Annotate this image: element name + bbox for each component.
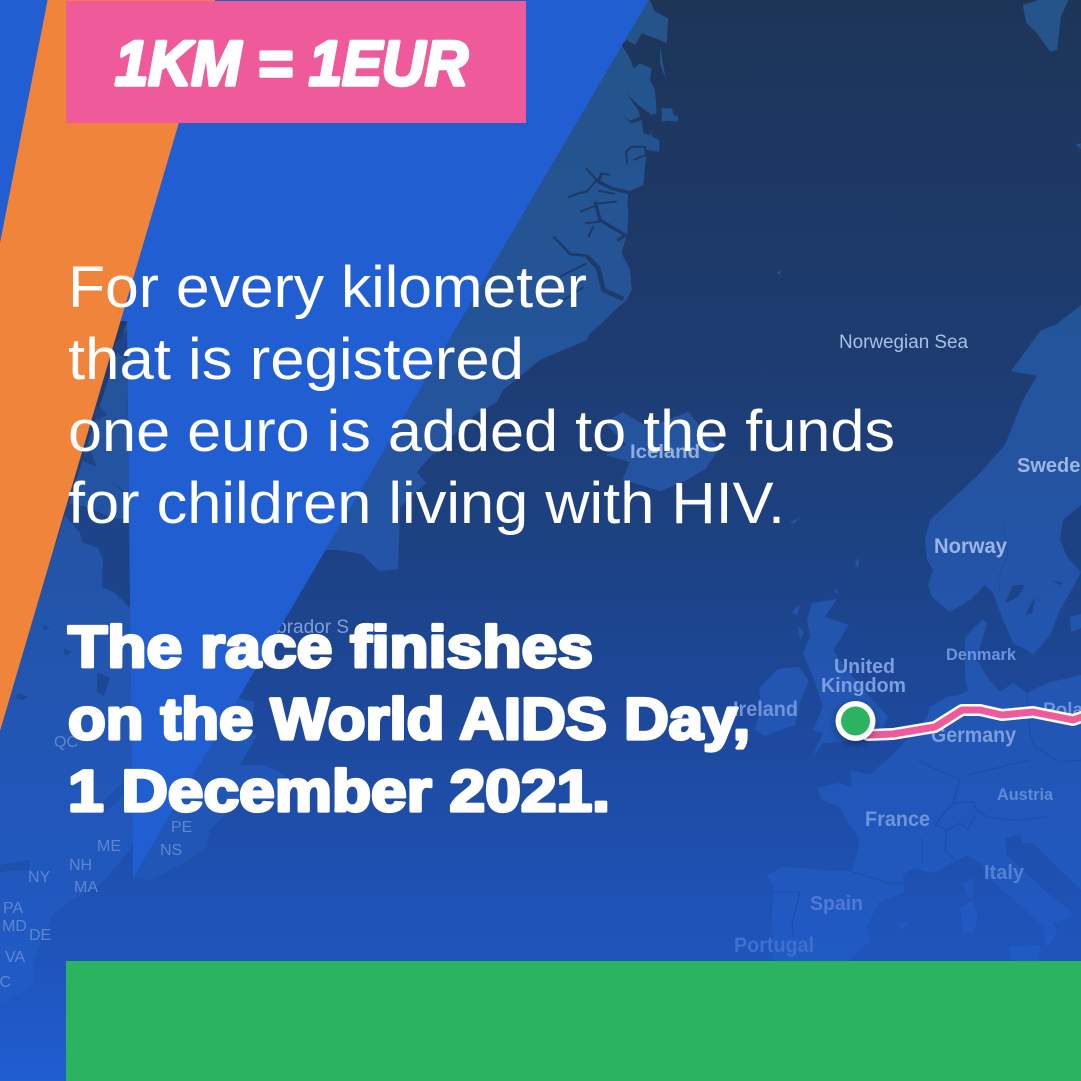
map labels: Portugal: [734, 934, 814, 957]
route line: [868, 710, 1081, 735]
map labels: NH: [69, 857, 92, 874]
start marker: [836, 701, 876, 741]
map labels: QC: [54, 734, 78, 751]
map labels: [0, 332, 1081, 991]
land: Europe continent: [767, 620, 1081, 961]
map labels: Iceland: [630, 442, 700, 463]
map labels: Austria: [997, 785, 1054, 804]
land: Gotland: [1070, 614, 1081, 632]
land: Canada and US east coast: [0, 321, 133, 1005]
map labels: Labrador S: [255, 617, 349, 638]
bold finish date text: [68, 615, 750, 824]
map labels: United: [834, 656, 895, 678]
map labels: NY: [28, 869, 51, 886]
water: Hudson and St Lawrence: [0, 330, 131, 872]
map labels: France: [865, 808, 930, 831]
green footer panel: [66, 961, 1081, 1081]
map labels: Denmark: [946, 645, 1017, 664]
orange diagonal stripe: [0, 0, 215, 731]
body text: that is registered: [68, 327, 524, 392]
map labels: PA: [3, 900, 23, 917]
map labels: Ireland: [733, 698, 798, 721]
body text: For every kilometer: [68, 255, 587, 320]
map labels: Norwegian Sea: [839, 332, 968, 353]
map labels: NS: [160, 842, 182, 859]
lakes and borders: [773, 520, 1081, 937]
map labels: Spain: [810, 893, 863, 915]
map labels: Germany: [931, 724, 1016, 747]
map labels: PE: [171, 819, 192, 836]
map labels: Kingdom: [821, 675, 906, 697]
islands: Svalbard, Iceland, Faroe: [606, 0, 1081, 524]
map labels: Norway: [934, 535, 1007, 558]
body text: [68, 255, 895, 536]
bold finish date text: on the World AIDS Day,: [68, 687, 750, 752]
bold finish date text: The race finishes: [68, 615, 593, 680]
map labels: VA: [5, 949, 25, 966]
map labels: Italy: [984, 862, 1025, 884]
body text: one euro is added to the funds: [68, 399, 895, 464]
bright blue diagonal panel: [0, 0, 649, 878]
bold finish date text: 1 December 2021.: [68, 759, 610, 824]
map labels: MA: [74, 879, 98, 896]
map labels: DE: [29, 927, 51, 944]
land: Norway and Sweden: [755, 305, 1081, 961]
land: Great Britain: [803, 599, 888, 758]
banner text: 1KM = 1EUR: [115, 29, 468, 99]
islands: Mediterranean and North Atlantic: [792, 558, 1040, 961]
map labels: ME: [97, 838, 121, 855]
land: Ireland: [755, 667, 809, 736]
pink banner: [66, 1, 526, 123]
land: Labrador and Maritimes: [133, 697, 287, 880]
map labels: MD: [2, 918, 27, 935]
top-left bright blue corner: [0, 0, 48, 243]
land: Greenland with fjords: [307, 0, 678, 571]
body text: for children living with HIV.: [68, 471, 785, 536]
